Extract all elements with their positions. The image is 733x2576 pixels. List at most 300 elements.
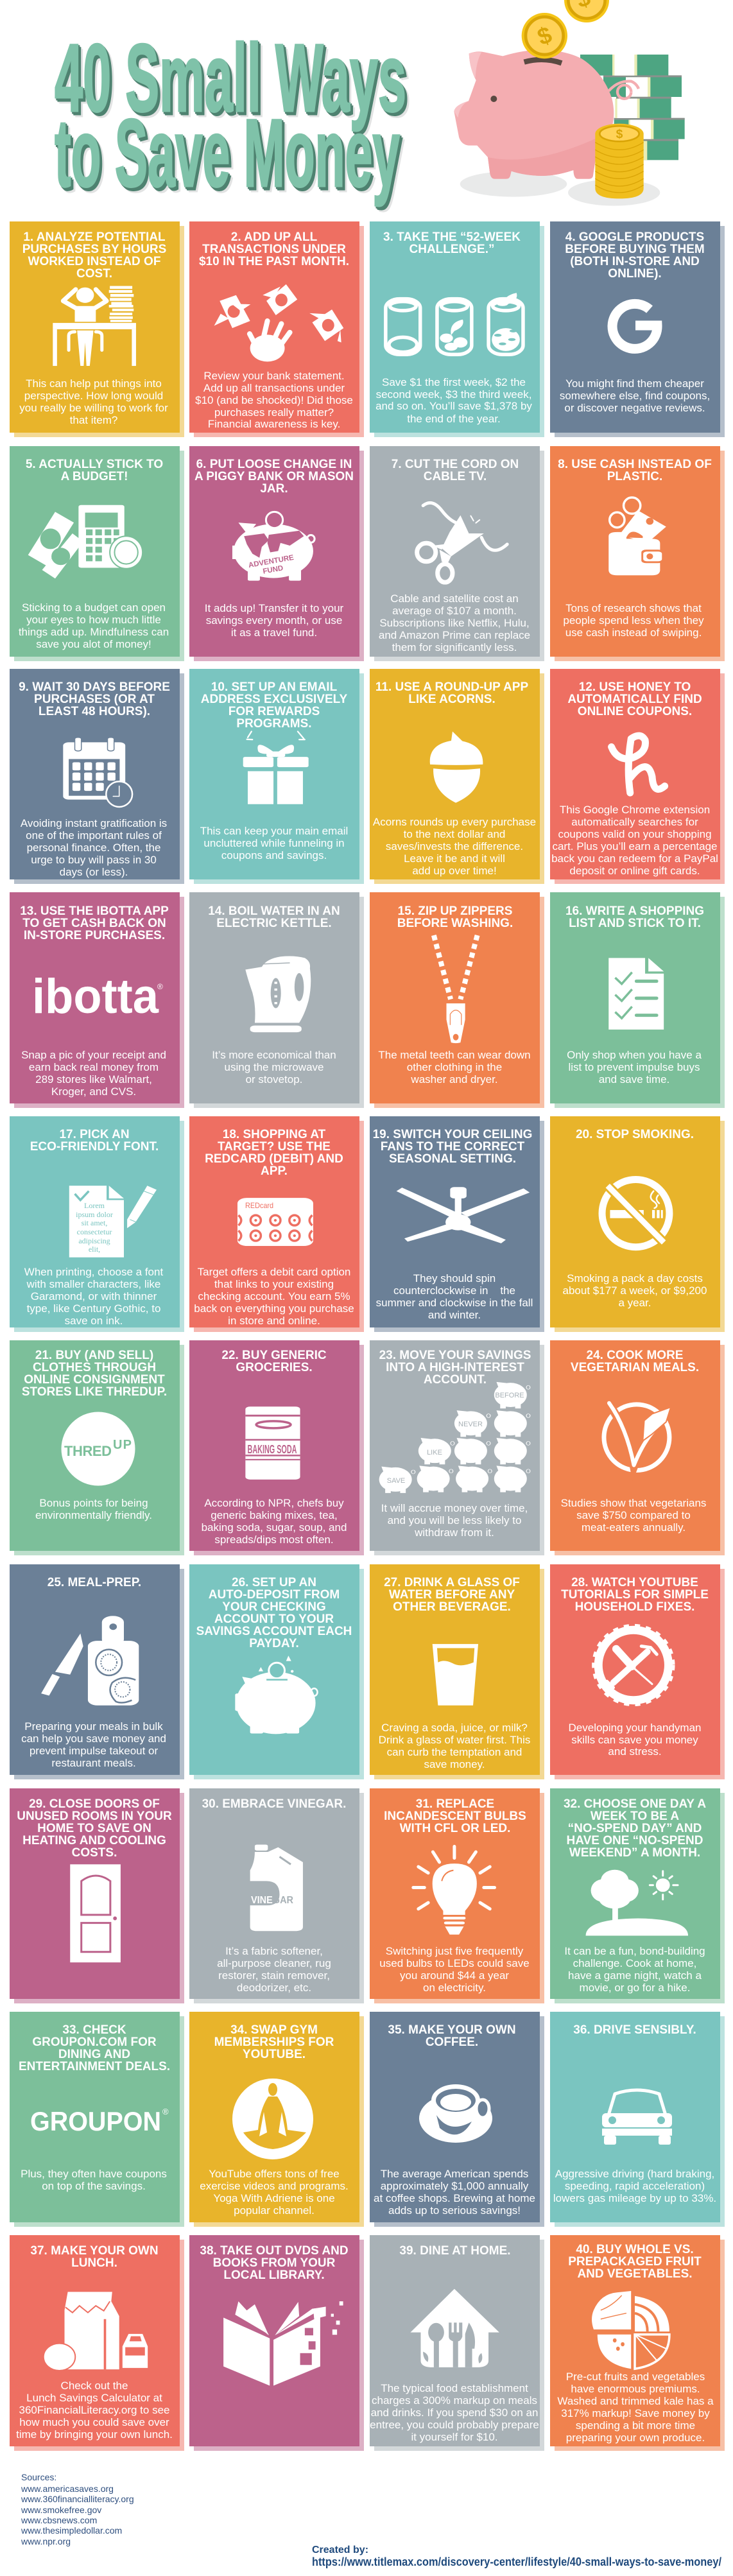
panel: tip 22 (189, 1340, 364, 1555)
body text: and save time. (599, 1073, 669, 1085)
body text: entree, you could probably prepare (370, 2419, 539, 2431)
body text: washer and dryer. (410, 1073, 498, 1085)
body text: used bulbs to LEDs could save (379, 1957, 530, 1969)
icon: knife and cutting board (41, 1616, 139, 1706)
icon: document and pencil: adipiscing (78, 1236, 110, 1245)
icon: paper lunch bag, apple and milk (44, 2292, 148, 2371)
heading: 5. ACTUALLY STICK TO (26, 458, 163, 471)
heading: LEAST 48 HOURS). (39, 705, 150, 718)
heading: UNUSED ROOMS IN YOUR (17, 1810, 172, 1823)
heading: HOUSEHOLD FIXES. (575, 1600, 694, 1614)
heading: ONLINE). (608, 267, 662, 281)
heading: INCANDESCENT BULBS (384, 1810, 526, 1823)
body text: It’s more economical than (212, 1049, 336, 1061)
body text: Cable and satellite cost an (390, 592, 519, 605)
body text: prevent impulse takeout or (30, 1745, 158, 1757)
body text: They should spin (413, 1272, 496, 1284)
icon: ibotta logo: ibotta (32, 969, 159, 1024)
panel: tip 39 (370, 2235, 544, 2451)
body text: The average American spends (381, 2168, 528, 2180)
panel: tip 19 (370, 1116, 544, 1332)
heading: LOCAL LIBRARY. (223, 2269, 325, 2282)
icon: vinegar bottle: VINEGAR (251, 1895, 293, 1906)
icon: money and calculator (28, 505, 142, 578)
heading: 13. USE THE IBOTTA APP (20, 904, 169, 918)
body text: uncluttered while funneling in (203, 837, 345, 849)
heading: VEGETARIAN MEALS. (571, 1361, 699, 1374)
credit: created by: Created by: (312, 2545, 368, 2555)
heading: 16. WRITE A SHOPPING (565, 904, 704, 918)
heading: 6. PUT LOOSE CHANGE IN (196, 458, 352, 471)
body text: that item? (70, 414, 117, 426)
heading: 33. CHECK (62, 2023, 126, 2037)
body text: YouTube offers tons of free (209, 2168, 340, 2180)
panel: tip 13 (10, 892, 184, 1108)
body text: generic baking mixes, tea, (211, 1509, 338, 1521)
heading: 22. BUY GENERIC (221, 1349, 327, 1362)
body text: coupons valid on your shopping (558, 828, 712, 840)
panel: tip 28 (550, 1564, 725, 1779)
panel: tip 24 (550, 1340, 725, 1555)
body text: charges a 300% markup on meals (372, 2394, 537, 2407)
body text: somewhere else, find coupons, (560, 390, 710, 402)
heading: WITH CFL OR LED. (400, 1822, 510, 1835)
panel: tip 35 (370, 2012, 544, 2227)
heading: AUTO-DEPOSIT FROM (209, 1588, 340, 1602)
heading: REDCARD (DEBIT) AND (205, 1152, 343, 1166)
body text: 360FinancialLiteracy.org to see (19, 2404, 169, 2416)
icon: ceiling fan (397, 1187, 530, 1243)
heading: 27. DRINK A GLASS OF (384, 1576, 520, 1589)
heading: IN-STORE PURCHASES. (24, 929, 165, 942)
body text: When printing, choose a font (24, 1266, 163, 1278)
panel: tip 3 (370, 221, 544, 437)
heading: LIKE ACORNS. (408, 693, 496, 706)
sources list: www.smokefree.gov (21, 2505, 101, 2515)
body text: back you can redeem for a PayPal (551, 852, 718, 865)
body text: Plus, they often have coupons (21, 2168, 167, 2180)
heading: 38. TAKE OUT DVDS AND (200, 2244, 349, 2258)
heading: 34. SWAP GYM (230, 2023, 318, 2037)
body text: Avoiding instant gratification is (21, 817, 167, 829)
heading: 37. MAKE YOUR OWN (30, 2244, 159, 2258)
sources list: www.cbsnews.com (21, 2515, 97, 2525)
icon: document and pencil: Lorem (84, 1201, 105, 1210)
heading: SAVINGS ACCOUNT EACH (196, 1625, 352, 1638)
body text: Washed and trimmed kale has a (557, 2395, 714, 2407)
icon: staircase of piggy banks: BEFORE (495, 1392, 524, 1399)
heading: PURCHASES (OR AT (34, 693, 155, 706)
body text: Yoga With Adriene is one (213, 2192, 335, 2204)
icon: wallet with cash and coins (608, 497, 666, 575)
body text: Snap a pic of your receipt and (21, 1049, 166, 1061)
body text: add up over time! (412, 865, 497, 877)
icon: document and pencil: consectetur (77, 1227, 112, 1236)
body text: spending a bit more time (576, 2419, 695, 2432)
icon: checklist document (608, 958, 664, 1030)
panel: tip 27 (370, 1564, 544, 1779)
panel: tip 10 (189, 669, 364, 884)
icon: baking soda box (245, 1406, 300, 1480)
heading: 23. MOVE YOUR SAVINGS (379, 1349, 531, 1362)
heading: JAR. (260, 482, 288, 496)
panel: tip 4 (550, 221, 725, 437)
icon: door (70, 1864, 121, 1962)
heading: STORES LIKE THREDUP. (22, 1385, 167, 1399)
heading: 36. DRIVE SENSIBLY. (573, 2023, 696, 2037)
icon: tree, hill and sun (586, 1870, 688, 1935)
icon: Google G (612, 304, 657, 349)
heading: ACCOUNT TO YOUR (214, 1612, 334, 1626)
body text: counterclockwise in the (393, 1284, 515, 1297)
body text: save money. (424, 1758, 485, 1770)
body text: Developing your handyman (569, 1722, 701, 1734)
icon: staircase of piggy banks (379, 1382, 530, 1493)
panel: tip 23 (370, 1340, 544, 1555)
panel: tip 14 (189, 892, 364, 1108)
panel: tip 1 (10, 221, 184, 437)
icon: car front view (602, 2090, 672, 2145)
heading: INTO A HIGH-INTEREST (386, 1361, 524, 1374)
heading: 25. MEAL-PREP. (47, 1576, 141, 1589)
body text: The metal teeth can wear down (378, 1049, 531, 1061)
heading: 2. ADD UP ALL (231, 230, 318, 244)
heading: A BUDGET! (61, 470, 128, 483)
heading: ONLINE COUPONS. (578, 705, 692, 718)
body text: or stovetop. (246, 1073, 302, 1085)
heading: 14. BOIL WATER IN AN (208, 904, 340, 918)
heading: ECO-FRIENDLY FONT. (30, 1140, 159, 1154)
heading: 7. CUT THE CORD ON (392, 458, 519, 471)
panel: tip 25 (10, 1564, 184, 1779)
panel: tip 2 (189, 221, 364, 437)
heading: CHALLENGE.” (410, 243, 494, 256)
body text: lowers gas mileage by up to 33%. (553, 2192, 716, 2204)
body text: Garamond, or with thinner (31, 1290, 157, 1302)
icon: house with cutlery (410, 2289, 499, 2367)
heading: GROUPON.COM FOR (32, 2036, 157, 2049)
heading: SEASONAL SETTING. (389, 1152, 516, 1166)
panel: tip 12 (550, 669, 725, 884)
heading: ELECTRIC KETTLE. (216, 917, 332, 930)
body text: purchases really matter? (214, 406, 334, 419)
icon: thredUP logo (62, 1412, 135, 1485)
body text: one of the important rules of (26, 829, 162, 842)
icon: gift box (243, 732, 309, 804)
heading: A PIGGY BANK OR MASON (194, 470, 354, 483)
body text: Target offers a debit card option (198, 1266, 350, 1278)
body text: Lunch Savings Calculator at (26, 2392, 162, 2404)
body text: on top of the savings. (42, 2180, 146, 2192)
heading: 3. TAKE THE “52-WEEK (383, 230, 521, 244)
body text: savings every month, or use (206, 614, 342, 627)
body text: and stress. (608, 1745, 662, 1758)
heading: HAVE ONE “NO-SPEND (567, 1834, 703, 1847)
heading: CABLE TV. (424, 470, 487, 483)
heading: OTHER BEVERAGE. (393, 1600, 511, 1614)
body text: other clothing in the (407, 1061, 502, 1073)
body text: have enormous premiums. (571, 2383, 700, 2395)
icon: calendar and clock (63, 738, 132, 807)
icon: coffee cup (419, 2084, 492, 2143)
body text: all-purpose cleaner, rug (217, 1957, 331, 1969)
body text: can curb the temptation and (387, 1746, 522, 1758)
body text: in store and online. (228, 1315, 320, 1327)
body text: Check out the (61, 2380, 128, 2392)
body text: meat-eaters annually. (582, 1521, 686, 1534)
heading: 32. CHOOSE ONE DAY A (564, 1797, 706, 1811)
icon: vegetarian V symbol (604, 1401, 673, 1471)
panel: tip 29 (10, 1788, 184, 2003)
icon: piggy bank with coin and stars (235, 1655, 318, 1734)
body text: save $750 compared to (576, 1509, 691, 1521)
icon: Honey logo letter h (612, 736, 665, 793)
body text: urge to buy will pass in 30 (31, 854, 157, 866)
icon: REDcard debit card (237, 1198, 313, 1246)
body text: Smoking a pack a day costs (567, 1272, 703, 1284)
body text: cart. Plus you’ll earn a percentage (552, 840, 718, 852)
body text: with smaller characters, like (26, 1278, 160, 1290)
heading: GROCERIES. (236, 1361, 313, 1374)
body text: According to NPR, chefs buy (204, 1497, 344, 1509)
heading: TARGET? USE THE (218, 1140, 331, 1154)
icon: electric kettle (245, 956, 311, 1032)
body text: it as a travel fund. (231, 627, 317, 639)
body text: It’s a fabric softener, (225, 1945, 323, 1957)
panel: tip 15 (370, 892, 544, 1108)
heading: 17. PICK AN (59, 1128, 130, 1141)
body text: This can keep your main email (200, 825, 348, 837)
heading: 35. MAKE YOUR OWN (388, 2023, 516, 2037)
heading: 1. ANALYZE POTENTIAL (23, 230, 166, 244)
body text: about $177 a week, or $9,200 (563, 1284, 707, 1297)
heading: HEATING AND COOLING (22, 1834, 166, 1847)
heading: 11. USE A ROUND-UP APP (375, 680, 528, 694)
icon: person at desk with paper stack (53, 286, 136, 366)
icon: thredUP logo: THRED (64, 1443, 112, 1459)
body text: Tons of research shows that (565, 602, 702, 614)
body text: spreads/dips most often. (214, 1534, 334, 1546)
icon: acorn (430, 732, 483, 803)
heading: 20. STOP SMOKING. (576, 1128, 694, 1141)
heading: BOOKS FROM YOUR (213, 2256, 336, 2270)
body text: Preparing your meals in bulk (24, 1720, 163, 1733)
panel: tip 36 (550, 2012, 725, 2227)
heading: LIST AND STICK TO IT. (569, 917, 701, 930)
heading: 28. WATCH YOUTUBE (571, 1576, 698, 1589)
icon: hand and flying money (214, 284, 343, 361)
body text: The typical food establishment (381, 2382, 528, 2394)
icon: three jars (386, 293, 523, 354)
panel: tip 20 (550, 1116, 725, 1332)
heading: WATER BEFORE ANY (389, 1588, 515, 1602)
heading: COST. (76, 267, 112, 281)
heading: AUTOMATICALLY FIND (567, 693, 702, 706)
panel: tip 33 (10, 2012, 184, 2227)
icon: document and pencil: ipsum dolor (76, 1210, 113, 1219)
sources list: www.npr.org (21, 2536, 71, 2546)
body text: use cash instead of swiping. (565, 627, 702, 639)
body text: back on everything you purchase (194, 1302, 354, 1315)
body text: at coffee shops. Brewing at home (374, 2192, 535, 2204)
body text: restorer, stain remover, (218, 1969, 330, 1982)
heading: ONLINE CONSIGNMENT (24, 1373, 165, 1387)
heading: PAYDAY. (249, 1637, 299, 1650)
body text: It adds up! Transfer it to your (205, 602, 344, 614)
heading: APP. (261, 1164, 288, 1178)
title: to Save Money (55, 99, 400, 207)
icon: vinegar bottle (250, 1845, 303, 1931)
icon: open book dissolving (223, 2301, 343, 2386)
body text: This can help put things into (26, 377, 162, 390)
heading: 39. DINE AT HOME. (399, 2244, 511, 2258)
illustration: piggy bank with coins and cash (454, 0, 685, 206)
body text: preparing your own produce. (566, 2432, 705, 2444)
heading: ACCOUNT. (424, 1373, 487, 1387)
panel: tip 37 (10, 2235, 184, 2451)
body text: saves/invests the difference. (386, 840, 523, 852)
icon: staircase of piggy banks: NEVER (458, 1421, 483, 1428)
icon: adventure fund piggy bank with world map: FUND (263, 564, 284, 576)
panel: tip 7 (370, 446, 544, 661)
panel: tip 30 (189, 1788, 364, 2003)
body text: checking account. You earn 5% (198, 1290, 350, 1302)
body text: automatically searches for (571, 816, 698, 828)
body text: Pre-cut fruits and vegetables (566, 2371, 705, 2383)
icon: document and pencil: elit, (89, 1245, 100, 1254)
heading: PREPACKAGED FRUIT (568, 2255, 702, 2269)
body text: baking soda, sugar, soup, and (202, 1521, 347, 1534)
body text: average of $107 a month. (392, 605, 517, 617)
heading: 31. REPLACE (416, 1797, 494, 1811)
heading: (BOTH IN-STORE AND (570, 255, 700, 268)
body text: Aggressive driving (hard braking, (555, 2168, 714, 2180)
heading: 30. EMBRACE VINEGAR. (202, 1797, 346, 1811)
icon: adventure fund piggy bank with world map (232, 512, 315, 581)
icon: thredUP logo: UP (113, 1438, 132, 1452)
body text: and so on. You’ll save $1,378 by (375, 400, 532, 412)
body text: 317% markup! Save money by (561, 2407, 710, 2419)
body text: and drinks. If you spend $30 on an (371, 2407, 538, 2419)
sources list: www.360financialliteracy.org (21, 2494, 134, 2504)
heading: WEEKEND” A MONTH. (569, 1846, 700, 1860)
heading: COFFEE. (426, 2036, 478, 2049)
title: 40 Small Ways (55, 24, 406, 132)
heading: LUNCH. (71, 2256, 117, 2270)
icon: Groupon logo: GROUPON (30, 2106, 161, 2136)
body text: Review your bank statement. (203, 370, 345, 382)
icon: glass of water (433, 1644, 478, 1706)
icon: adventure fund piggy bank with world map: ADVENTURE (248, 554, 295, 569)
body text: Sticking to a budget can open (22, 601, 166, 614)
body text: restaurant meals. (51, 1757, 136, 1769)
heading: BEFORE BUYING THEM (565, 243, 705, 256)
panel: tip 38 (189, 2235, 364, 2451)
body text: or discover negative reviews. (564, 402, 705, 414)
heading: WEEK TO BE A (591, 1810, 679, 1823)
heading: 24. COOK MORE (587, 1349, 683, 1362)
body text: on electricity. (423, 1982, 486, 1994)
icon: REDcard debit card: REDcard (245, 1201, 273, 1210)
icon: gear with wrench and screwdriver (594, 1626, 673, 1704)
body text: speeding, rapid acceleration) (565, 2180, 705, 2192)
body text: days (or less). (60, 866, 128, 878)
panel: tip 11 (370, 669, 544, 884)
body text: that links to your existing (214, 1278, 334, 1290)
body text: your eyes to how much little (26, 614, 161, 626)
panel: tip 16 (550, 892, 725, 1108)
heading: COSTS. (72, 1846, 117, 1860)
illustration: piggy bank with coins and cash: $ (534, 21, 555, 51)
body text: This Google Chrome extension (560, 804, 710, 816)
body text: time by bringing your own lunch. (16, 2428, 173, 2441)
body text: Drink a glass of water first. This (379, 1734, 530, 1746)
body text: second week, $3 the third week, (376, 388, 531, 401)
panel: tip 32 (550, 1788, 725, 2003)
heading: HOME TO SAVE ON (37, 1822, 151, 1835)
heading: MEMBERSHIPS FOR (214, 2036, 334, 2049)
panel: tip 34 (189, 2012, 364, 2227)
heading: ADDRESS EXCLUSIVELY (201, 693, 348, 706)
body text: $10 (and be shocked)! Did those (195, 394, 353, 406)
icon: light bulb (413, 1847, 495, 1935)
body text: list to prevent impulse buys (568, 1061, 700, 1073)
body text: summer and clockwise in the fall (376, 1297, 533, 1309)
body text: them for significantly less. (392, 641, 517, 653)
body text: Kroger, and CVS. (51, 1085, 136, 1098)
heading: $10 IN THE PAST MONTH. (199, 255, 349, 268)
body text: things add up. Mindfulness can (19, 626, 169, 638)
body text: Save $1 the first week, $2 the (382, 376, 526, 388)
body text: withdraw from it. (414, 1526, 494, 1539)
body text: and Amazon Prime can replace (379, 629, 530, 641)
body text: popular channel. (234, 2204, 315, 2217)
icon: person meditating in circle (232, 2079, 313, 2159)
heading: 15. ZIP UP ZIPPERS (398, 904, 512, 918)
body text: you really be willing to work for (19, 402, 168, 414)
body text: Leave it be and it will (404, 852, 505, 865)
heading: FOR REWARDS (229, 705, 320, 718)
body text: type, like Century Gothic, to (27, 1302, 160, 1315)
heading: YOUTUBE. (243, 2048, 306, 2061)
body text: a year. (618, 1297, 651, 1309)
panel: tip 40 (550, 2235, 725, 2451)
heading: 29. CLOSE DOORS OF (29, 1797, 160, 1811)
heading: 8. USE CASH INSTEAD OF (558, 458, 712, 471)
icon: cut fruit and vegetables circle (592, 2291, 669, 2369)
sources list: www.americasaves.org (21, 2484, 114, 2494)
body text: environmentally friendly. (35, 1509, 152, 1521)
body text: and winter. (428, 1309, 481, 1321)
heading: FANS TO THE CORRECT (381, 1140, 525, 1154)
body text: can help you save money and (21, 1733, 166, 1745)
heading: “NO-SPEND DAY” AND (568, 1822, 702, 1835)
sources list: Sources: (21, 2472, 56, 2482)
body text: movie, or go for a hike. (580, 1982, 690, 1994)
heading: AND VEGETABLES. (577, 2267, 693, 2281)
body text: exercise videos and programs. (200, 2180, 349, 2192)
heading: PROGRAMS. (236, 717, 312, 730)
body text: Financial awareness is key. (208, 418, 340, 430)
credit: created by (312, 2545, 721, 2568)
body text: people spend less when they (563, 614, 704, 627)
body text: approximately $1,000 annually (381, 2180, 529, 2192)
body text: adds up to serious savings! (388, 2204, 521, 2217)
title (55, 24, 406, 207)
sources list: www.thesimpledollar.com (21, 2525, 122, 2536)
body text: deodorizer, etc. (237, 1982, 311, 1994)
heading: 9. WAIT 30 DAYS BEFORE (19, 680, 170, 694)
